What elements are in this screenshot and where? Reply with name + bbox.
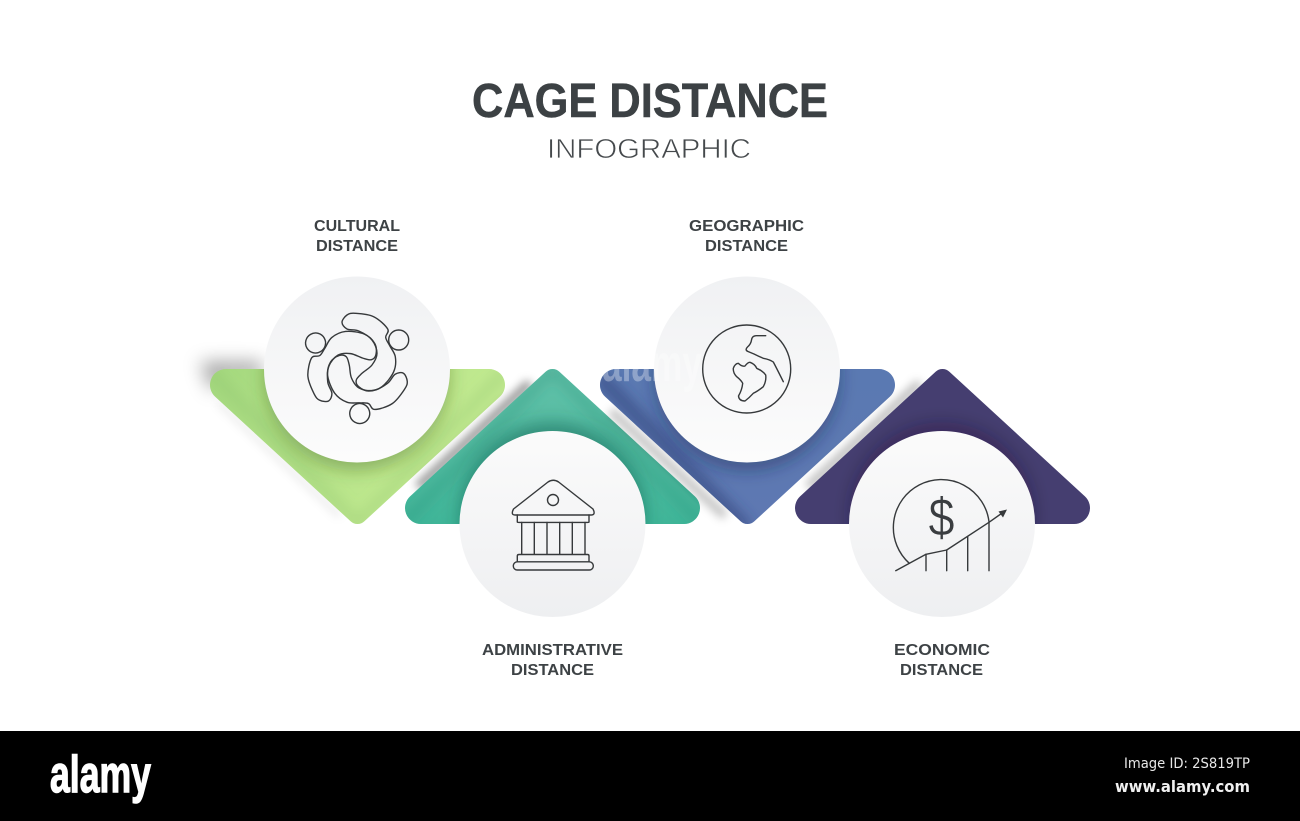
panel: economic distance: [795, 369, 1090, 679]
footer bar: [0, 731, 1300, 821]
icon: globe: [703, 325, 791, 413]
subtitle: INFOGRAPHIC: [547, 133, 751, 164]
image id: Image ID: 2S819TP: [1124, 756, 1250, 772]
icon: people in a circle: [287, 309, 411, 436]
label: cultural distance: [314, 218, 400, 255]
label: geographic distance: GEOGRAPHIC: [689, 218, 804, 235]
purple triangle: [795, 369, 1090, 524]
footer logo: alamy: [50, 746, 151, 804]
circle: [264, 276, 450, 462]
teal triangle: [405, 369, 700, 524]
label: administrative distance: ADMINISTRATIVE: [482, 642, 623, 659]
circle: [654, 276, 840, 462]
title: CAGE DISTANCE: [472, 75, 828, 128]
website: www.alamy.com: [1115, 777, 1250, 796]
circle: [460, 431, 646, 617]
blue triangle: [600, 369, 895, 524]
label: economic distance: [894, 642, 990, 679]
icon: bank building: [512, 480, 594, 570]
label: economic distance: ECONOMIC: [894, 642, 990, 659]
label: administrative distance: [482, 642, 623, 679]
icon: dollar growth chart: [893, 480, 1007, 571]
green triangle: [193, 350, 505, 524]
panel: cultural distance: [200, 218, 508, 524]
panel: administrative distance: [402, 369, 702, 679]
label: cultural distance: CULTURAL: [314, 218, 400, 235]
watermark ghost text: alamy: [602, 335, 702, 393]
label: economic distance: DISTANCE: [900, 662, 983, 679]
label: geographic distance: [689, 218, 804, 255]
icon: dollar growth chart: $: [928, 488, 954, 548]
label: geographic distance: DISTANCE: [705, 238, 788, 255]
label: cultural distance: DISTANCE: [316, 238, 398, 255]
panel: geographic distance: [598, 218, 895, 530]
circle: [849, 431, 1035, 617]
label: administrative distance: DISTANCE: [511, 662, 594, 679]
